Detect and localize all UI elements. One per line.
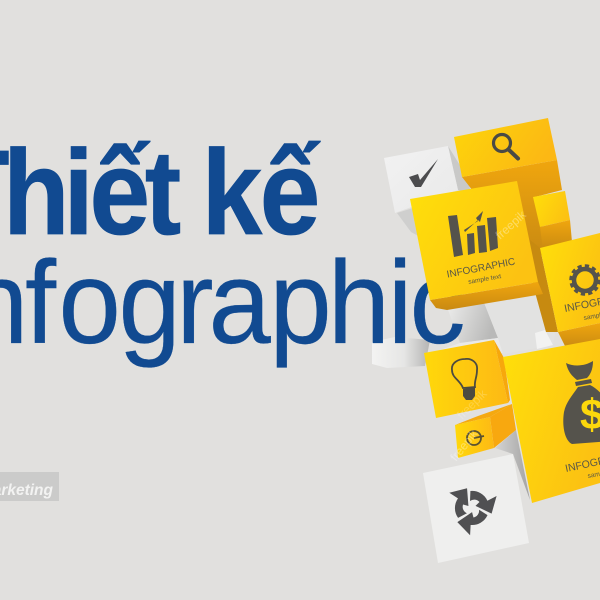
watermark: freepik	[447, 207, 530, 464]
yellow cube: bar chart	[410, 181, 543, 310]
icon: magnifier	[494, 134, 518, 158]
orange tile: power	[455, 404, 516, 458]
icon: light bulb	[452, 359, 477, 400]
label: sample text: sample text	[468, 273, 502, 286]
icon: bar chart with arrow	[448, 211, 498, 257]
white tile: check mark	[384, 146, 472, 213]
icon: gear	[571, 266, 599, 294]
icon: check mark	[409, 159, 438, 187]
watermark: freepik: freepik	[454, 386, 490, 422]
yellow cube: search	[454, 118, 562, 255]
icon: recycle arrows	[445, 484, 497, 538]
label: INFOGRAPHIC: INFOGRAPHIC	[446, 257, 516, 281]
white cubes behind the heading	[372, 208, 555, 368]
icon: money bag	[563, 361, 600, 444]
shadow behind lower tiles	[495, 430, 530, 500]
watermark: freepik: freepik	[447, 426, 481, 464]
yellow cube: small	[533, 191, 572, 250]
dark side between cubes	[530, 240, 558, 332]
yellow cube: gear	[540, 233, 600, 348]
white tile: recycle	[423, 454, 529, 563]
yellow cube: money bag	[503, 339, 600, 503]
yellow tile: light bulb	[424, 340, 510, 418]
icon: power	[467, 431, 484, 445]
logo badge	[0, 472, 59, 501]
watermark: freepik: freepik	[493, 207, 530, 242]
